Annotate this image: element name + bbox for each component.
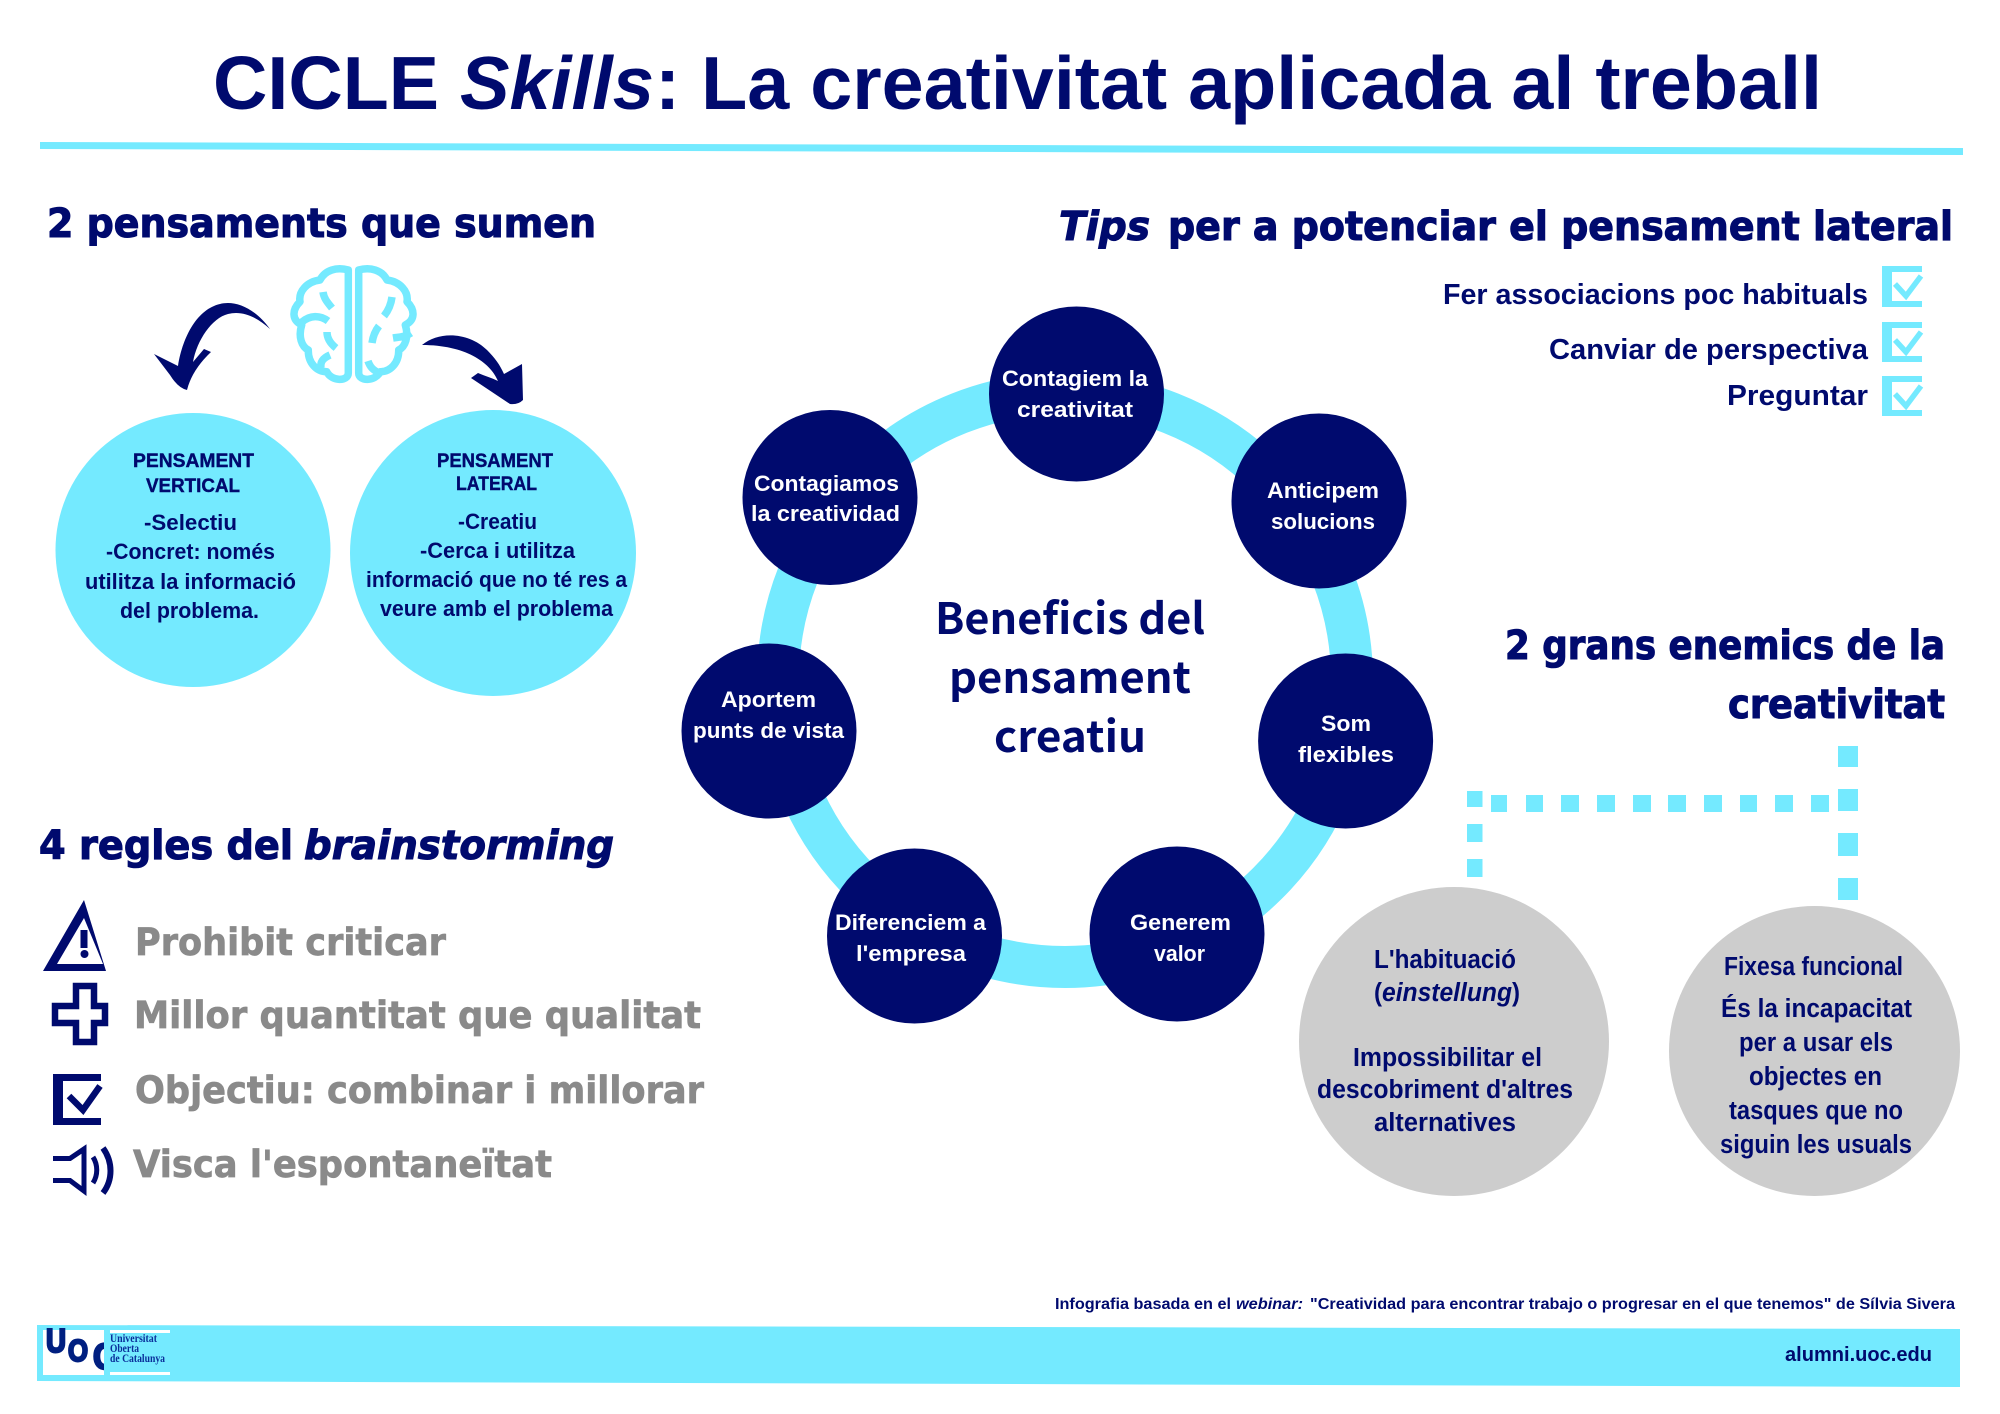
arrow: left curved arrow (154, 303, 270, 390)
logo: UOC: C (93, 1336, 117, 1377)
tip 2: Canviar de perspectiva (1549, 334, 1869, 366)
node: generem valor: valor (1154, 941, 1205, 966)
node: diferenciem: l'empresa (856, 941, 967, 966)
dotted connector (1467, 746, 1858, 900)
panel: enemics (1299, 623, 1960, 1196)
node: diferenciem: Diferenciem a (835, 910, 986, 935)
heading: tips: per a potenciar el pensament lateral (1168, 204, 1953, 250)
title: : La creativitat aplicada al treball (655, 41, 1822, 125)
center text: pensament (949, 644, 1191, 706)
panel: 2 pensaments que sumen (47, 201, 636, 696)
node: som flexibles (1258, 654, 1433, 828)
node: contagiem (989, 306, 1164, 482)
logo: UOC: de Catalunya (110, 1353, 165, 1365)
node: contagiamos (742, 410, 918, 585)
title: CICLE (213, 41, 439, 125)
circle: fixesa funcional: Fixesa funcional (1724, 953, 1903, 981)
node: diferenciem (827, 848, 1002, 1024)
node: contagiem: Contagiem la (1002, 366, 1148, 391)
circle: pensament lateral: LATERAL (456, 474, 537, 495)
node: aportem (682, 644, 856, 818)
circle: habituacio: ) (1512, 979, 1520, 1007)
node: anticipem: solucions (1271, 509, 1375, 534)
center text (935, 585, 1205, 765)
circle: habituacio: einstellung (1382, 979, 1512, 1007)
icon: warning triangle (43, 900, 106, 971)
node: aportem: punts de vista (693, 718, 844, 743)
tip 3 (1727, 376, 1922, 416)
circle: pensament vertical: del problema. (120, 598, 259, 623)
circle: pensament vertical: utilitza la informació (85, 569, 296, 594)
panel: 4 regles del brainstorming (39, 823, 705, 1193)
footer bar (37, 1325, 1960, 1387)
circle: pensament lateral: informació que no té res a (366, 567, 628, 592)
panel: tips (1059, 204, 1953, 416)
source credit: webinar: (1236, 1296, 1303, 1313)
heading: 4 regles: brainstorming (304, 823, 614, 869)
node: generem valor (1090, 846, 1264, 1022)
icon: plus (55, 986, 105, 1042)
center text: creatiu (994, 703, 1146, 765)
heading: enemics (1505, 623, 1945, 728)
node: aportem: Aportem (721, 687, 816, 712)
node: anticipem (1232, 414, 1406, 588)
circle: fixesa funcional (1669, 906, 1960, 1196)
circle: habituacio: descobriment d'altres (1317, 1076, 1573, 1104)
circle: pensament lateral: -Creatiu (458, 509, 537, 534)
logo: UOC (43, 1328, 170, 1375)
ring (778, 393, 1352, 967)
heading: tips: Tips (1059, 204, 1150, 250)
footer url: alumni.uoc.edu (1785, 1344, 1932, 1366)
circle: fixesa funcional: objectes en (1749, 1063, 1882, 1091)
heading: 4 regles: 4 regles del (39, 823, 293, 869)
node: contagiem: creativitat (1017, 397, 1134, 422)
heading: 2 pensaments: 2 pensaments que sumen (47, 201, 596, 247)
rule text: prohibit criticar: Prohibit criticar (135, 921, 447, 964)
logo: UOC: U (46, 1322, 66, 1359)
rule text: objectiu: Objectiu: combinar i millorar (135, 1069, 705, 1112)
source credit: Infografia basada en el (1055, 1296, 1231, 1313)
circle: pensament lateral: -Cerca i utilitza (420, 538, 576, 563)
rule text: millor quantitat: Millor quantitat que qualitat (134, 994, 701, 1037)
circle: pensament lateral (350, 410, 636, 696)
circle: pensament lateral: veure amb el problema (380, 596, 614, 621)
tip 2 (1549, 322, 1922, 366)
logo: UOC: Oberta (110, 1343, 139, 1355)
circle: habituacio: alternatives (1374, 1109, 1516, 1137)
circle: fixesa funcional: siguin les usuals (1720, 1131, 1912, 1159)
circle: pensament vertical: -Concret: només (106, 539, 275, 564)
circle: fixesa funcional: per a usar els (1739, 1029, 1893, 1057)
heading: enemics: 2 grans enemics de la (1505, 623, 1945, 669)
tip 1: Fer associacions poc habituals (1443, 279, 1868, 311)
circle: pensament vertical: PENSAMENT (133, 451, 254, 472)
node: anticipem: Anticipem (1267, 478, 1379, 503)
circle: fixesa funcional: És la incapacitat (1721, 994, 1912, 1023)
logo: UOC: O (68, 1333, 88, 1368)
node: som flexibles: Som (1321, 711, 1371, 736)
circle: habituacio (1299, 887, 1609, 1196)
icon: checkbox (53, 1074, 101, 1125)
circle: habituacio: L'habituació (1374, 946, 1516, 974)
heading: enemics: creativitat (1728, 682, 1945, 728)
center text: Beneficis del (935, 585, 1205, 647)
circle: habituacio: Impossibilitar el (1353, 1044, 1542, 1072)
title underline (40, 142, 1963, 155)
arrow: right curved arrow (422, 335, 523, 404)
node: som flexibles: flexibles (1298, 742, 1394, 767)
node: contagiamos: la creatividad (751, 501, 900, 526)
logo: UOC: Universitat (110, 1333, 157, 1345)
node: generem valor: Generem (1130, 910, 1231, 935)
icon: speaker (53, 1148, 110, 1193)
node: contagiamos: Contagiamos (754, 471, 899, 496)
circle: fixesa funcional: tasques que no (1729, 1097, 1903, 1125)
tip 3: Preguntar (1727, 380, 1868, 412)
icon: brain (294, 269, 413, 379)
circle: pensament vertical: -Selectiu (144, 510, 237, 535)
circle: pensament vertical (56, 413, 330, 687)
heading: 4 regles (39, 823, 614, 869)
rule text: visca: Visca l'espontaneïtat (133, 1143, 552, 1186)
chart: beneficis cycle (682, 306, 1433, 1024)
circle: habituacio: ( (1374, 979, 1382, 1007)
tip 1 (1443, 266, 1922, 311)
source credit (1055, 1296, 1955, 1313)
circle: pensament vertical: VERTICAL (146, 476, 240, 497)
circle: pensament lateral: PENSAMENT (437, 451, 553, 472)
title: Skills (460, 41, 654, 125)
source credit: "Creatividad para encontrar trabajo o progresar en el que tenemos" de Sílvia Sivera (1310, 1296, 1955, 1313)
